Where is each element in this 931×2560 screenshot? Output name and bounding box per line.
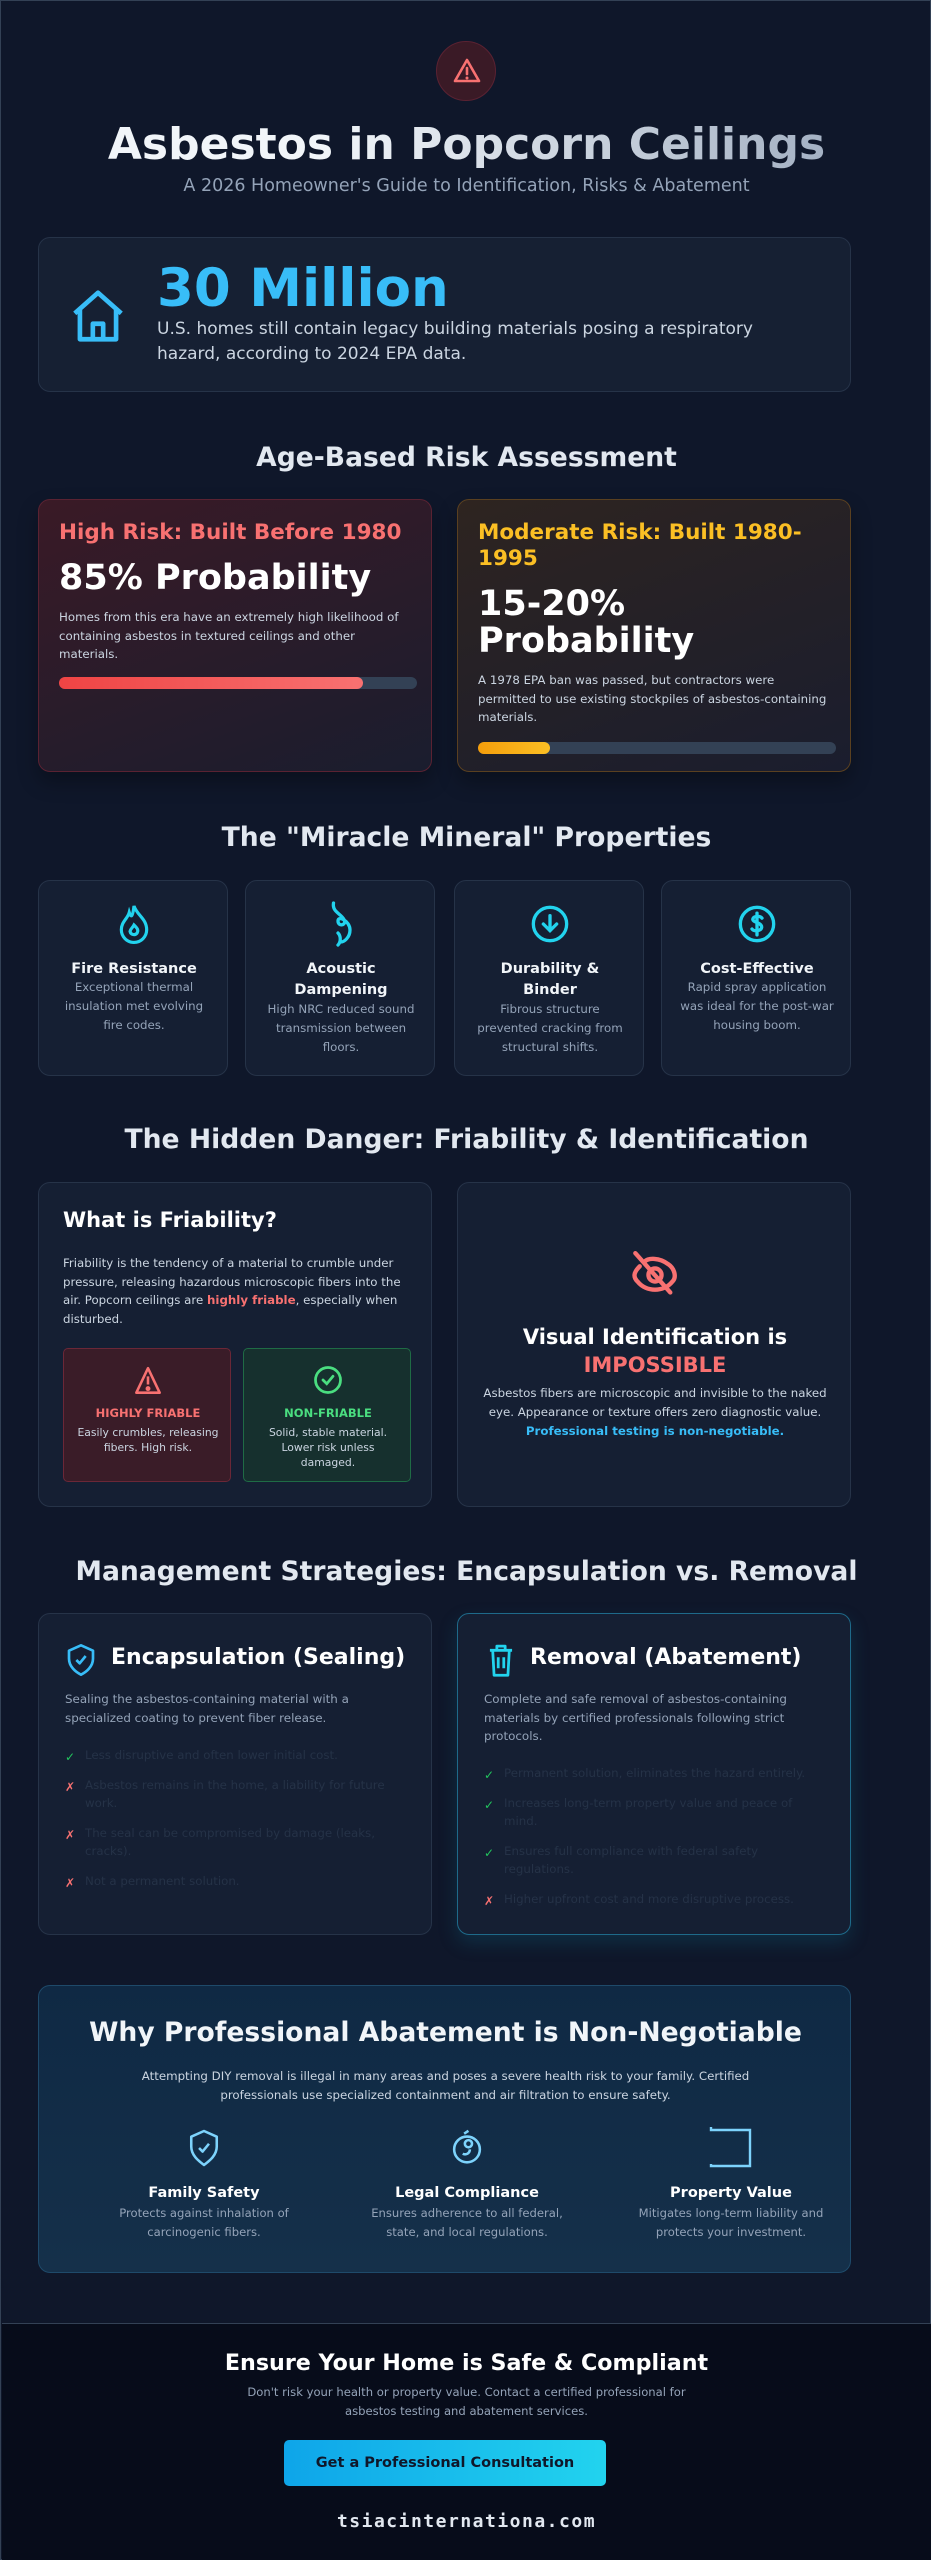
panel: acoustic: Acoustic: [306, 961, 376, 977]
panel: high risk: Homes from this era have an extremely high likelihood of containing asbestos in textured ceilings and other materials.: [59, 610, 398, 661]
item: family safety: [119, 2130, 289, 2239]
panel: why professional: [38, 1985, 851, 2273]
panel: encapsulation: Asbestos remains in the home, a liability for future work.: [85, 1778, 385, 1810]
sub-panel: non-friable: NON-FRIABLE: [284, 1406, 372, 1420]
domain: tsiacinternationa.com: [337, 2511, 596, 2532]
footer: [2, 2323, 931, 2560]
item: family safety: Family Safety: [148, 2185, 260, 2201]
panel: encapsulation: ✗: [65, 1876, 75, 1890]
item: property value: Mitigates long-term liability and protects your investment.: [639, 2206, 823, 2239]
progress bar: [59, 677, 417, 689]
panel: durability: Binder: [523, 982, 577, 998]
panel: encapsulation: ✗: [65, 1828, 75, 1842]
panel: why professional: Attempting DIY removal is illegal in many areas and poses a severe health risk to your family. Certified professionals use specialized containment and air filtration to ensure safety.: [142, 2069, 749, 2102]
heading: miracle mineral: The "Miracle Mineral" Properties: [222, 822, 711, 853]
panel: removal: Removal (Abatement): [530, 1645, 801, 1670]
panel: acoustic: [245, 880, 435, 1076]
panel: moderate risk: A 1978 EPA ban was passed, but contractors were permitted to use existing stockpiles of asbestos-containing materials.: [478, 673, 826, 724]
sub-panel: highly friable: HIGHLY FRIABLE: [96, 1406, 200, 1420]
panel: visual identification: Visual Identification is: [523, 1325, 787, 1349]
item: legal compliance: [371, 2130, 563, 2239]
sub-panel: highly friable: [63, 1348, 231, 1482]
subtitle: A 2026 Homeowner's Guide to Identification, Risks & Abatement: [183, 176, 750, 196]
panel: removal: Higher upfront cost and more disruptive process.: [504, 1892, 794, 1906]
icon: house: [73, 290, 123, 342]
heading: management: Management Strategies: Encapsulation vs. Removal: [76, 1556, 857, 1587]
icon: warning: [436, 41, 496, 101]
button: [284, 2440, 606, 2486]
panel: acoustic: High NRC reduced sound transmission between floors.: [268, 1002, 414, 1054]
panel: acoustic: Dampening: [294, 982, 388, 998]
item: family safety: Protects against inhalation of carcinogenic fibers.: [119, 2206, 289, 2239]
stat number: 30 Million: [157, 258, 449, 319]
panel: high risk: [38, 499, 432, 772]
panel: friability: [38, 1182, 432, 1507]
panel: visual identification: IMPOSSIBLE: [584, 1353, 726, 1377]
panel: friability: Friability is the tendency of a material to crumble under pressure, releasing hazardous microscopic fibers into the air. Popcorn ceilings are highly friable, especially when disturbed.: [63, 1256, 401, 1326]
panel: moderate risk: Moderate Risk: Built 1980-1995: [478, 520, 802, 571]
panel: fire: Fire Resistance: [71, 961, 197, 977]
panel: moderate risk: Probability: [478, 621, 694, 661]
panel: cost: Cost-Effective: [700, 961, 814, 977]
panel: removal: ✓: [484, 1798, 494, 1812]
panel: cost: [661, 880, 851, 1076]
panel: durability: Durability &: [501, 961, 599, 977]
panel: removal: ✓: [484, 1846, 494, 1860]
panel: encapsulation: [38, 1613, 432, 1935]
panel: cost: Rapid spray application was ideal for the post-war housing boom.: [680, 980, 834, 1032]
panel: removal: Ensures full compliance with federal safety regulations.: [504, 1844, 758, 1876]
panel: fire: [38, 880, 228, 1076]
item: legal compliance: Legal Compliance: [395, 2185, 539, 2201]
item: legal compliance: Ensures adherence to all federal, state, and local regulations.: [371, 2206, 563, 2239]
panel: encapsulation: Sealing the asbestos-containing material with a specialized coating to prevent fiber release.: [65, 1692, 349, 1725]
panel: visual identification: [457, 1182, 851, 1507]
footer: Don't risk your health or property value. Contact a certified professional for asbestos testing and abatement services.: [247, 2385, 686, 2418]
panel: stat: [38, 237, 851, 392]
button: Get a Professional Consultation: [316, 2455, 574, 2471]
item: property value: [639, 2127, 823, 2239]
panel: high risk: High Risk: Built Before 1980: [59, 520, 401, 545]
sub-panel: highly friable: Easily crumbles, releasing fibers. High risk.: [77, 1426, 219, 1454]
panel: moderate risk: 15-20%: [478, 584, 625, 624]
panel: removal: Complete and safe removal of asbestos-containing materials by certified professionals following strict protocols.: [484, 1692, 787, 1743]
heading: age risk: Age-Based Risk Assessment: [256, 442, 677, 473]
panel: encapsulation: The seal can be compromised by damage (leaks, cracks).: [85, 1826, 375, 1858]
progress bar: [478, 742, 836, 754]
panel: why professional: Why Professional Abatement is Non-Negotiable: [89, 2017, 802, 2048]
panel: encapsulation: Less disruptive and often lower initial cost.: [85, 1748, 338, 1762]
panel: removal: [457, 1613, 851, 1935]
panel: fire: Exceptional thermal insulation met evolving fire codes.: [65, 980, 203, 1032]
panel: friability: What is Friability?: [63, 1208, 277, 1232]
panel: removal: Permanent solution, eliminates the hazard entirely.: [504, 1766, 805, 1780]
sub-panel: non-friable: Solid, stable material. Lower risk unless damaged.: [269, 1426, 387, 1469]
panel: encapsulation: ✗: [65, 1780, 75, 1794]
sub-panel: non-friable: [243, 1348, 411, 1482]
panel: encapsulation: Not a permanent solution.: [85, 1874, 240, 1888]
stat text: U.S. homes still contain legacy building materials posing a respiratory hazard, according to 2024 EPA data.: [157, 319, 753, 364]
icon: eye-off: [632, 1251, 677, 1295]
panel: durability: [454, 880, 644, 1076]
panel: encapsulation: Encapsulation (Sealing): [111, 1645, 405, 1670]
heading: hidden danger: The Hidden Danger: Friability & Identification: [124, 1124, 809, 1155]
panel: visual identification: Asbestos fibers are microscopic and invisible to the naked eye. Appearance or texture offers zero diagnostic value. Professional testing is non-negotiable.: [483, 1386, 827, 1438]
panel: encapsulation: ✓: [65, 1750, 75, 1764]
panel: moderate risk: [457, 499, 851, 772]
panel: removal: ✗: [484, 1894, 494, 1908]
panel: high risk: 85% Probability: [59, 558, 371, 598]
panel: durability: Fibrous structure prevented cracking from structural shifts.: [477, 1002, 623, 1054]
panel: removal: ✓: [484, 1768, 494, 1782]
title: Asbestos in Popcorn Ceilings: [108, 119, 825, 170]
footer: Ensure Your Home is Safe & Compliant: [225, 2350, 708, 2376]
item: property value: Property Value: [670, 2185, 792, 2201]
panel: removal: Increases long-term property value and peace of mind.: [504, 1796, 792, 1828]
